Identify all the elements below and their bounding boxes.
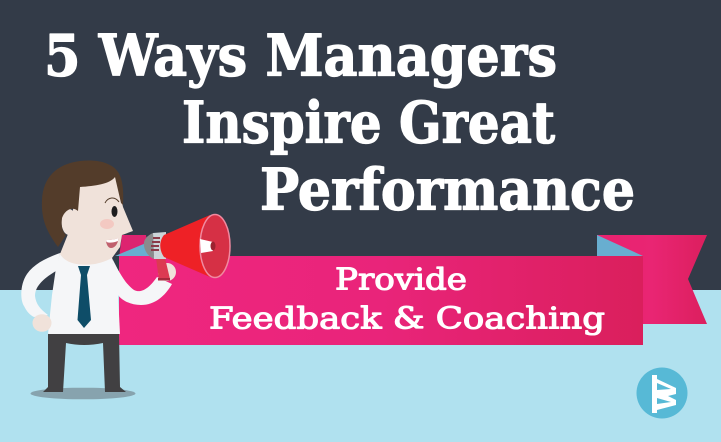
eyebrow [105,198,119,203]
mouthpiece [144,233,154,259]
megaphone [144,214,230,278]
hair [42,160,123,247]
subtitle text: Feedback & Coaching [209,302,605,336]
title: 5 Ways Managers [44,22,557,90]
front arm [112,258,172,305]
logo badge [636,368,688,418]
mouth [106,238,118,248]
title: Inspire Great [182,90,556,156]
logo mark [652,375,676,413]
subtitle text: Provide [335,262,467,298]
vents [151,237,160,251]
ear [62,209,76,235]
shirt torso [48,253,120,334]
ribbon: main banner [119,256,643,345]
bell inner cone [200,239,213,253]
trousers [43,333,126,392]
cheek [100,219,114,229]
neck and face [60,172,133,265]
eye [112,206,118,217]
ribbon: left fold [115,235,150,258]
shadow [30,388,136,399]
subtitle text [209,262,605,336]
background: light blue bottom [0,290,721,442]
bell rim [200,214,230,278]
back hand [32,314,52,332]
title [44,22,635,224]
character: manager with megaphone [21,160,230,399]
ribbon: right tail [597,235,707,324]
horn [160,215,210,277]
back arm [21,253,60,317]
megaphone handle [156,258,170,280]
collar [153,232,166,259]
background: dark top [0,0,721,290]
hand [158,263,176,281]
title: Performance [260,156,635,224]
necktie [78,266,91,328]
